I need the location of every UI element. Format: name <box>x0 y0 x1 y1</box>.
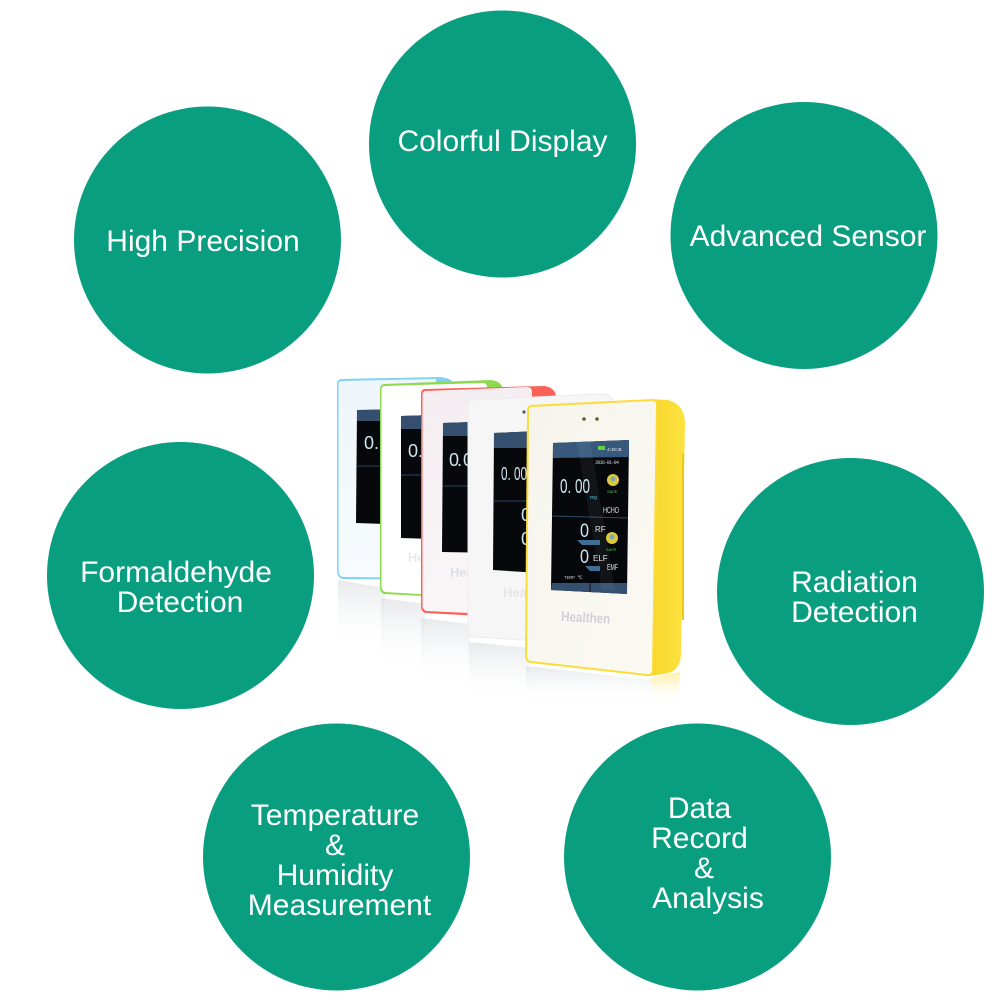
circle: High Precision: High Precision <box>106 225 300 258</box>
floor reflections <box>338 580 680 704</box>
colour screen: SAFE <box>606 547 617 552</box>
device: red <box>421 386 556 620</box>
colour screen: mg <box>590 495 597 501</box>
colour screen: HCHO <box>603 506 619 515</box>
colour screen: RF <box>595 525 606 534</box>
colour screen: 0 <box>580 547 589 568</box>
circle: Colorful Display <box>369 10 636 278</box>
circle: Advanced Sensor <box>670 102 938 369</box>
product photo: five air monitor devices <box>337 377 685 704</box>
colour screen: EMF <box>607 563 618 572</box>
device: white: Heal <box>503 585 530 600</box>
device: red: Hea <box>450 565 475 580</box>
circle: Data Record & Analysis <box>564 724 831 990</box>
colour screen: 4:10:31 <box>607 447 622 453</box>
circle: Advanced Sensor: Advanced Sensor <box>690 220 926 253</box>
circle: Radiation Detection: Radiation <box>791 566 918 599</box>
front face <box>526 400 657 675</box>
device: green <box>380 380 503 600</box>
device: white: 0 <box>521 505 531 525</box>
circle: High Precision <box>74 106 341 374</box>
device: green: 0. <box>408 441 423 461</box>
circle: Data Record & Analysis: Record <box>651 822 748 855</box>
circle: Formaldehyde Detection <box>47 442 314 709</box>
colour screen: 0. 00 <box>560 476 590 498</box>
colour screen: 0 <box>580 521 589 542</box>
circle: Data Record & Analysis: & <box>694 852 714 885</box>
brand name: Healthen <box>561 608 611 627</box>
device: red: 0. 0 <box>449 450 473 470</box>
device: white: 0. 00 <box>501 464 527 484</box>
colour screen: TEMP ℃ <box>564 575 584 581</box>
circle: Formaldehyde Detection: Formaldehyde <box>80 556 272 589</box>
circle: Colorful Display: Colorful Display <box>397 125 608 158</box>
colour screen: ELF <box>593 554 608 563</box>
device: white <box>468 394 614 645</box>
colour screen: SAFE <box>607 489 618 494</box>
device: yellow <box>526 399 685 676</box>
colour screen: 2016-01-04 <box>595 460 619 466</box>
colour screen <box>551 440 629 594</box>
circle: Data Record & Analysis: Data <box>668 792 731 825</box>
circle: Temperature & Humidity Measurement: Measurement <box>248 889 432 922</box>
device: white: 0 <box>521 529 531 549</box>
yellow side <box>648 399 685 676</box>
circle: Formaldehyde Detection: Detection <box>117 586 243 619</box>
circle: Data Record & Analysis: Analysis <box>652 882 764 915</box>
circle: Radiation Detection <box>717 458 984 725</box>
device: blue: 0. <box>364 433 379 453</box>
circle: Temperature & Humidity Measurement: & <box>325 829 345 862</box>
device: green: Hea <box>408 550 433 565</box>
circle: Temperature & Humidity Measurement <box>203 724 470 990</box>
device: blue <box>337 377 454 580</box>
circle: Temperature & Humidity Measurement: Temperature <box>251 799 419 832</box>
circle: Radiation Detection: Detection <box>791 596 918 629</box>
circle: Temperature & Humidity Measurement: Humidity <box>277 859 393 892</box>
